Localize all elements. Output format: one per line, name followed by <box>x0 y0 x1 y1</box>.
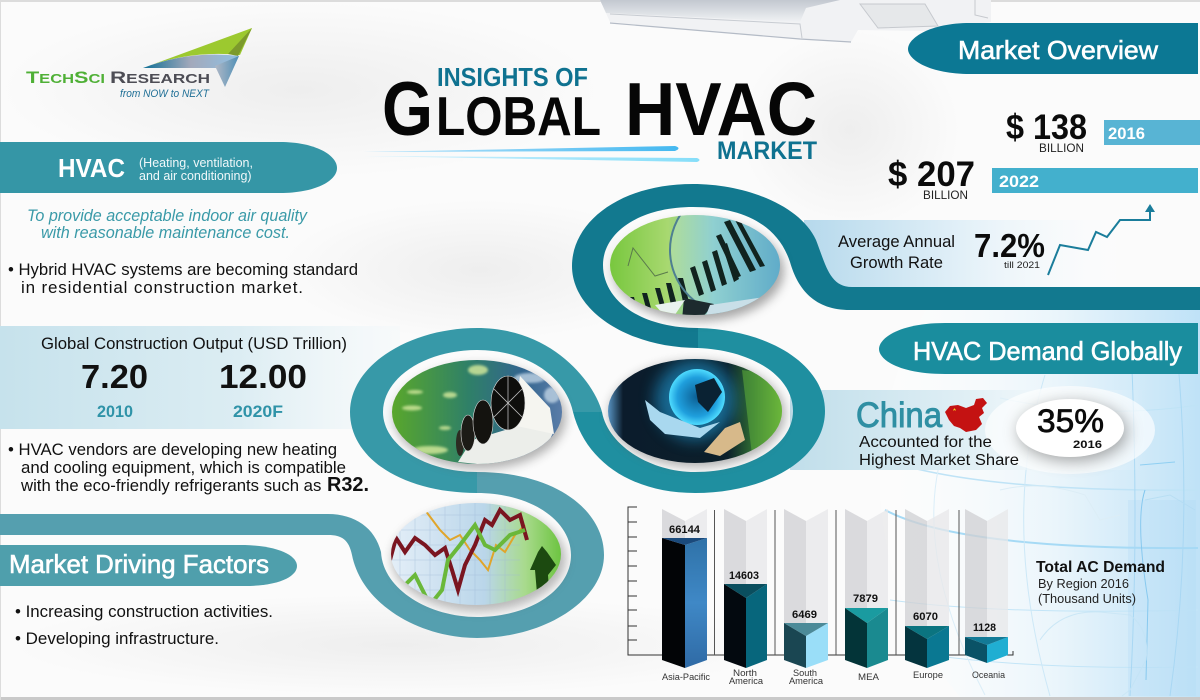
driving factors heading: Market Driving Factors <box>9 549 269 579</box>
value 2016: $ 138 <box>1006 108 1087 147</box>
share year: 2016 <box>1073 439 1102 451</box>
panel: market driving factors <box>0 545 297 648</box>
value 2022 unit: BILLION <box>923 188 968 202</box>
bar: Oceania: Oceania <box>972 670 1005 680</box>
logo tagline: from NOW to NEXT <box>120 88 210 100</box>
bar: Asia-Pacific <box>662 524 711 682</box>
construction year 2020F: 2020F <box>233 402 283 421</box>
hvac pill heading: HVAC <box>58 153 125 183</box>
panel: china band background <box>790 390 1145 470</box>
bar 2016 label: 2016 <box>1108 124 1145 143</box>
vendors bullet: with the eco-friendly refrigerants such as <box>20 476 326 495</box>
china description: Accounted for the <box>859 434 992 451</box>
market overview pill <box>908 23 1198 74</box>
panel: growth band background <box>804 220 1198 288</box>
title <box>363 62 817 165</box>
title line: insights of: INSIGHTS OF <box>437 62 588 92</box>
share badge <box>985 386 1155 474</box>
construction value 2020: 12.00 <box>219 358 307 395</box>
hvac pill note: (Heating, ventilation, <box>139 156 253 170</box>
bar: MEA: MEA <box>858 672 879 682</box>
air conditioner unit <box>600 0 991 42</box>
title swoosh <box>363 146 700 162</box>
growth rate value: 7.2% <box>974 227 1045 264</box>
bar: South America <box>784 609 828 686</box>
construction value 2010: 7.20 <box>81 358 148 395</box>
market overview heading: Market Overview <box>958 35 1158 65</box>
icon: china map <box>945 398 987 432</box>
growth rate period: till 2021 <box>1004 260 1040 270</box>
panel: ribbon and photos <box>0 184 1200 638</box>
bar: South America: South <box>793 668 817 678</box>
china label: China <box>856 396 942 435</box>
title line: global hvac: LOBAL <box>436 85 601 147</box>
growth rate label: Average Annual <box>838 232 955 251</box>
photo: globe in hands <box>605 355 785 467</box>
panel: market overview <box>838 23 1200 275</box>
share value: 35% <box>1037 403 1104 439</box>
hvac purpose: with reasonable maintenance cost. <box>41 223 290 242</box>
ribbon segment bottom <box>0 472 604 638</box>
bar 2022 label: 2022 <box>999 172 1039 191</box>
panel: hvac demand globally <box>856 323 1198 474</box>
chart subtitle: By Region 2016 <box>1038 576 1129 591</box>
hvac pill note: and air conditioning) <box>139 169 252 183</box>
panel: construction band background <box>0 326 400 429</box>
bar: South America: 6469 <box>792 609 817 621</box>
title line: global hvac <box>382 67 817 152</box>
photo: market trend lines <box>388 500 566 611</box>
bar chart: total AC demand by region <box>628 507 1165 686</box>
hybrid systems bullet: in residential construction market. <box>21 278 303 297</box>
logo: TechSci Research <box>26 28 252 100</box>
ribbon segment middle <box>573 328 825 493</box>
ribbon segment top <box>572 184 1200 348</box>
logo arrow mark <box>143 28 252 87</box>
hybrid systems bullet: • Hybrid HVAC systems are becoming standard <box>8 260 358 279</box>
bar: North America: 14603 <box>729 570 759 582</box>
growth rate label: Growth Rate <box>850 253 943 272</box>
bar 2022 <box>992 168 1198 193</box>
photo: analytics chart and magnifier <box>608 215 790 327</box>
title line: market: MARKET <box>717 137 817 165</box>
china description: Highest Market Share <box>859 452 1019 469</box>
hvac purpose: To provide acceptable indoor air quality <box>27 206 308 225</box>
title line: global hvac: G <box>382 67 433 152</box>
value 2016 unit: BILLION <box>1039 141 1084 155</box>
bar: North America: North <box>733 668 757 678</box>
driving factor bullets: • Developing infrastructure. <box>15 629 219 648</box>
logo wordmark research: R ESEARCH <box>110 68 210 87</box>
construction year 2010: 2010 <box>97 402 133 421</box>
panel: hvac definition <box>0 142 358 297</box>
demand heading: HVAC Demand Globally <box>913 336 1182 366</box>
chart subtitle: (Thousand Units) <box>1038 591 1136 606</box>
bar: MEA: 7879 <box>853 593 878 605</box>
driving factor bullets: • Increasing construction activities. <box>15 602 273 621</box>
bar: MEA <box>845 593 888 682</box>
logo wordmark: TECH SCI <box>26 68 105 87</box>
bar: Europe <box>905 611 949 680</box>
bar: Europe: Europe <box>913 670 943 680</box>
bar: Europe: 6070 <box>913 611 938 623</box>
title line: global hvac: HVAC <box>625 67 817 151</box>
bar: North America <box>724 570 767 686</box>
bar 2016 <box>1104 120 1200 145</box>
photo: industrial ventilation fans <box>390 358 566 470</box>
bar: Oceania: 1128 <box>973 622 996 634</box>
vendors bullet: R32. <box>327 474 369 496</box>
driving factors pill <box>0 545 297 586</box>
vendors bullet: and cooling equipment, which is compatible <box>21 458 346 477</box>
bar: Asia-Pacific: Asia-Pacific <box>662 672 711 682</box>
value 2022: $ 207 <box>888 155 975 194</box>
hvac pill <box>0 142 337 193</box>
bar: South America: America <box>789 676 823 686</box>
chart title: Total AC Demand <box>1036 559 1165 576</box>
bar: North America: America <box>729 676 763 686</box>
bar: Oceania <box>965 622 1008 680</box>
chart axes and ghost columns <box>628 507 1013 655</box>
globe backdrop <box>880 310 1200 697</box>
vendors bullet: • HVAC vendors are developing new heating <box>8 440 337 459</box>
icon: growth arrow <box>1048 204 1155 275</box>
ribbon segment left <box>350 328 602 493</box>
panel: global construction output <box>41 334 347 421</box>
construction heading: Global Construction Output (USD Trillion) <box>41 334 347 353</box>
bar: Asia-Pacific: 66144 <box>669 524 701 536</box>
demand pill <box>879 323 1198 374</box>
